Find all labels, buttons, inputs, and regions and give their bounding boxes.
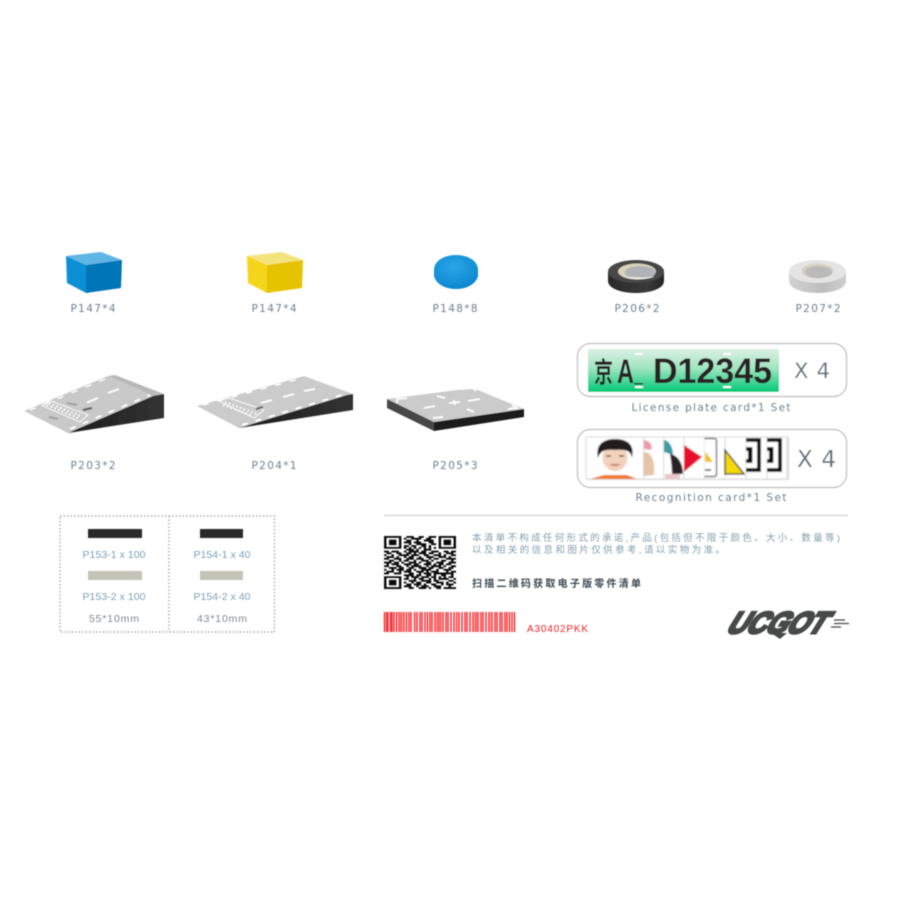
size label 43*10mm: 43*10mm: [197, 613, 247, 625]
strip: black P154-1: P154-1 x 40: [194, 549, 251, 561]
part: blue round cap P148: P148*8: [432, 303, 478, 315]
strip: gray P153-2: [82, 571, 146, 603]
part: black ring P206: P206*2: [614, 303, 660, 315]
strip: gray P154-2: [194, 571, 251, 603]
part: ramp P203: [24, 375, 164, 472]
recognition card stack: [586, 437, 789, 480]
multiplier: X 4: [797, 447, 836, 473]
strip: black P153-1: [82, 529, 146, 561]
panel: license plate card: [578, 344, 846, 396]
part: ramp P204: [197, 376, 353, 472]
barcode: [384, 612, 514, 632]
disclaimer text: 本清单不构成任何形式的承诺,产品(包括但不限于颜色、大小、数量等): [472, 532, 840, 544]
part: blue round cap P148: [432, 255, 478, 315]
part: flat block P205: P205*3: [432, 460, 478, 472]
license plate: [588, 349, 779, 392]
logo: UCGOT: UCGOT: [721, 606, 839, 639]
part: yellow cube P147: [247, 252, 303, 315]
disclaimer text: 以及相关的信息和图片仅供参考,请以实物为准。: [472, 544, 725, 556]
part: blue cube P147: [66, 252, 122, 315]
strip: gray P154-2: P154-2 x 40: [194, 591, 251, 603]
panel: recognition card: [578, 430, 846, 488]
size label 55*10mm: 55*10mm: [89, 613, 139, 625]
part: yellow cube P147: P147*4: [252, 303, 297, 315]
license plate: A: [617, 353, 634, 391]
multiplier: X 4: [794, 359, 830, 383]
part: ramp P204: P204*1: [252, 460, 296, 472]
part: light gray ring P207: P207*2: [796, 303, 840, 315]
license plate: 京: [594, 357, 613, 388]
product code: A30402PKK: [527, 624, 588, 635]
strip: black P154-1: [194, 529, 251, 561]
license plate: D12345: [653, 352, 772, 391]
part: flat block P205: [387, 388, 524, 472]
QR code: [384, 536, 456, 589]
disclaimer text: [472, 532, 840, 556]
part: light gray ring P207: [789, 260, 846, 315]
part: ramp P203: P203*2: [70, 460, 116, 472]
caption: license plate card: License plate card*1 Set: [632, 402, 790, 414]
part: black ring P206: [608, 260, 664, 315]
strip: black P153-1: P153-1 x 100: [82, 549, 146, 561]
QR code caption: 扫描二维码获取电子版零件清单: [472, 577, 641, 590]
panel: strips table: [60, 516, 274, 632]
caption: recognition card: Recognition card*1 Set: [636, 492, 786, 504]
strip: gray P153-2: P153-2 x 100: [82, 591, 146, 603]
part: blue cube P147: P147*4: [70, 303, 116, 315]
